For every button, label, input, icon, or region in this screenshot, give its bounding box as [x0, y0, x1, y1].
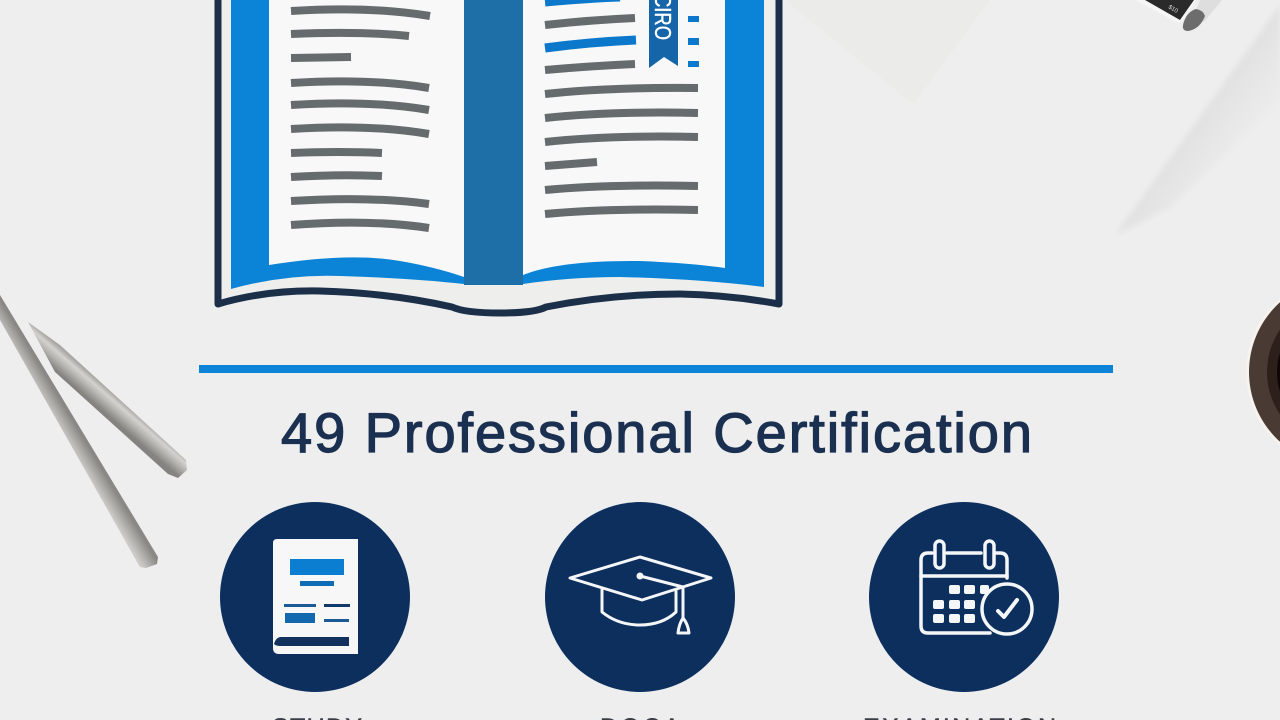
highlighted lines — [545, 0, 636, 48]
white sheet shadow — [1115, 5, 1280, 235]
icon: calendar badge — [869, 502, 1059, 692]
bullet marks — [688, 16, 699, 67]
right page — [523, 0, 725, 275]
coffee cup — [1246, 275, 1280, 469]
pen: front — [0, 295, 158, 568]
spine — [464, 0, 523, 285]
left page — [269, 0, 464, 277]
book outline — [218, 0, 779, 313]
pen clip — [1135, 0, 1222, 31]
item: examination — [863, 502, 1059, 720]
icon: graduation cap badge — [545, 502, 735, 692]
divider — [199, 365, 1113, 373]
title: 49 Professional Certification — [281, 401, 1032, 464]
left page text lines — [291, 9, 430, 228]
item: cap — [545, 502, 735, 720]
right page text lines — [545, 18, 698, 214]
book cover blue — [231, 0, 764, 289]
pen clip: $10 — [1167, 5, 1179, 15]
notepaper corner — [785, 0, 990, 102]
icon: book badge — [220, 502, 410, 692]
item: study — [220, 502, 410, 720]
ribbon bookmark — [649, 0, 678, 68]
pen: rear — [28, 322, 187, 478]
open book illustration — [218, 0, 779, 313]
pens — [0, 295, 187, 568]
